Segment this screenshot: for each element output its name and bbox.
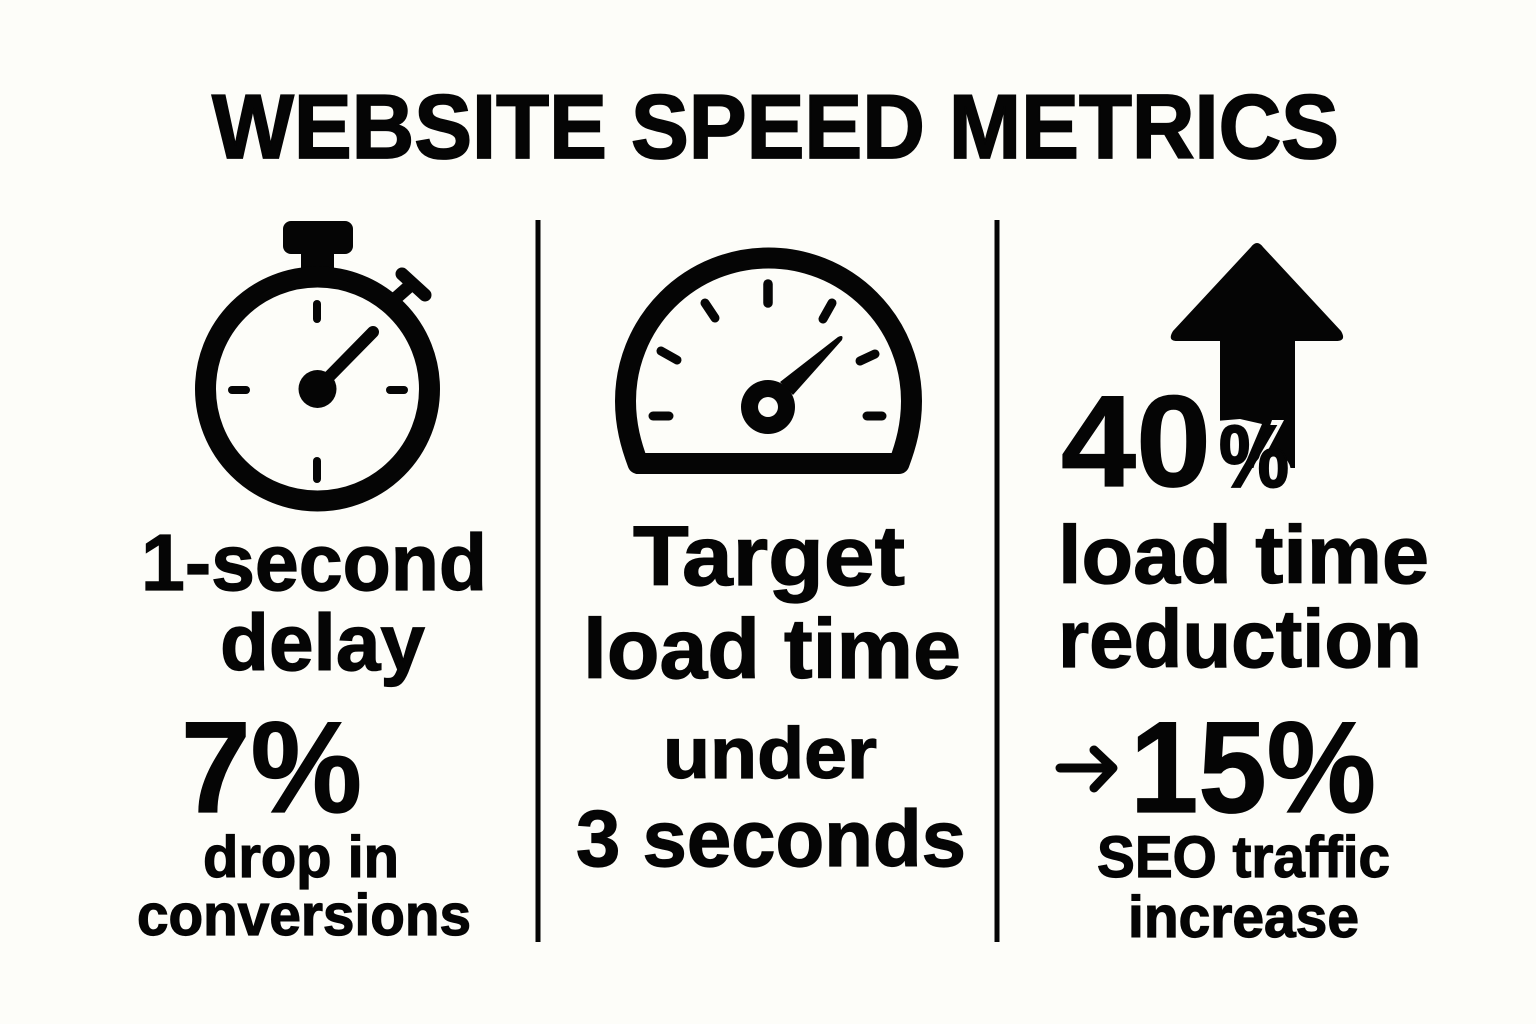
title: WEBSITE SPEED METRICS [212, 77, 1339, 178]
stat: 40%: 40 [1061, 368, 1211, 514]
arrow: leads to [1060, 750, 1113, 788]
label: load time reduction [1058, 510, 1429, 685]
icon: up arrow [1171, 243, 1343, 491]
label: under 3 seconds: under [663, 714, 877, 794]
label: SEO traffic increase [1097, 825, 1390, 950]
stat: 40% [1061, 368, 1289, 514]
label: SEO traffic increase: SEO traffic [1097, 825, 1390, 890]
stat: 7%: 7% [181, 694, 362, 840]
label: 1-second delay: delay [220, 598, 426, 687]
label: drop in conversions: drop in [203, 825, 399, 890]
stat: 40%: % [1219, 407, 1289, 506]
label: drop in conversions: conversions [137, 883, 471, 948]
panel: 1-second delay [137, 221, 487, 948]
icon: speedometer gauge [626, 258, 912, 464]
label: 1-second delay [141, 518, 487, 687]
icon: stopwatch [206, 221, 430, 501]
label: under 3 seconds: 3 seconds [576, 794, 966, 883]
panel: target load time [576, 258, 966, 883]
label: SEO traffic increase: increase [1128, 885, 1359, 950]
label: under 3 seconds [576, 714, 966, 883]
stat: 15%: 15% [1130, 694, 1376, 840]
panel: load time reduction [1058, 243, 1429, 950]
label: target load time: Target [633, 509, 905, 603]
label: 1-second delay: 1-second [141, 518, 487, 607]
label: target load time: load time [583, 602, 961, 696]
label: load time reduction: load time [1058, 510, 1429, 601]
label: drop in conversions [137, 825, 471, 948]
label: target load time [583, 509, 961, 696]
label: load time reduction: reduction [1058, 594, 1422, 685]
